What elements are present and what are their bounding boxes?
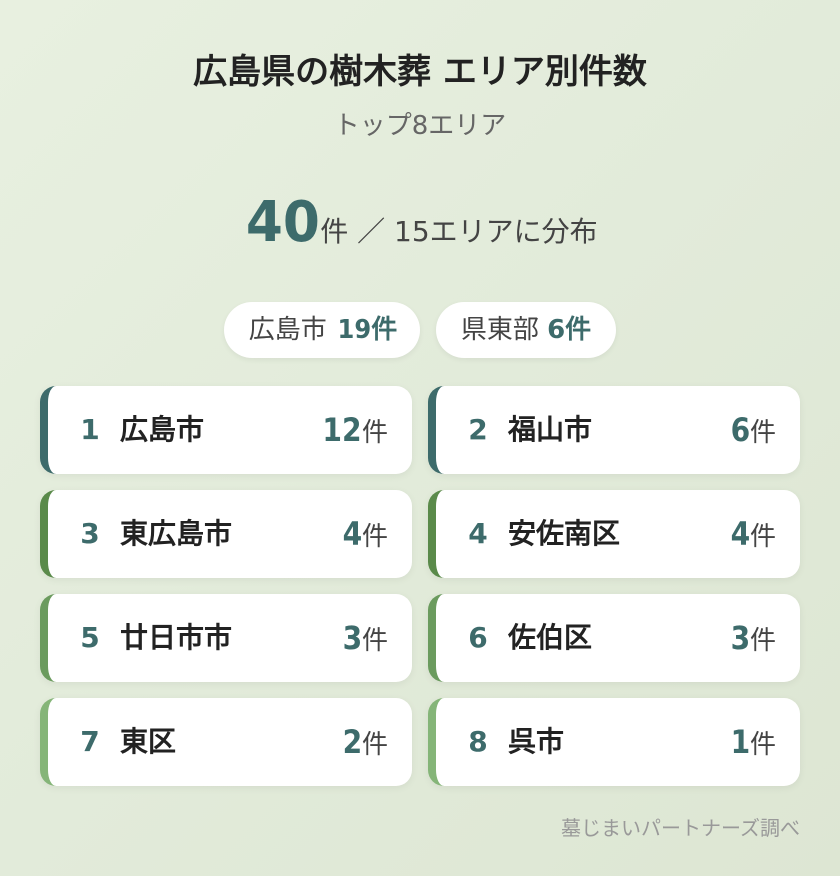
total summary — [246, 190, 598, 255]
card: rank 2: 2 — [468, 413, 488, 446]
card: rank 7 — [40, 698, 412, 786]
card: rank 1 — [40, 386, 412, 474]
card: rank 8: 1 — [730, 723, 750, 761]
card: rank 7: 2 — [342, 723, 362, 761]
card: rank 2: 6 — [730, 411, 750, 449]
card: rank 4: 4 — [468, 517, 488, 550]
card: rank 5 — [40, 594, 412, 682]
card: rank 3: 件 — [362, 522, 388, 552]
card: rank 4: 件 — [750, 522, 776, 552]
card: rank 5: 廿日市市 — [120, 621, 232, 654]
pill: east prefecture — [436, 302, 616, 358]
card: rank 6: 6 — [468, 621, 488, 654]
card: rank 7: 7 — [80, 725, 100, 758]
card: rank 3 — [40, 490, 412, 578]
card: rank 3: 東広島市 — [120, 517, 232, 550]
card: rank 7: 東区 — [120, 725, 176, 758]
card: rank 8 — [428, 698, 800, 786]
card: rank 6: 件 — [750, 626, 776, 656]
source credit: 墓じまいパートナーズ調べ — [561, 816, 800, 840]
card: rank 4: 4 — [730, 515, 750, 553]
pill: Hiroshima city: 19 — [338, 315, 371, 345]
card: rank 5: 5 — [80, 621, 100, 654]
card: rank 4 — [428, 490, 800, 578]
card: rank 8: 件 — [750, 730, 776, 760]
card: rank 6 — [428, 594, 800, 682]
card: rank 2: 福山市 — [508, 413, 592, 446]
total summary: 40 — [246, 190, 320, 255]
total summary: 件 ／ 15エリアに分布 — [320, 215, 598, 248]
card: rank 4: 安佐南区 — [508, 517, 620, 550]
card: rank 1: 広島市 — [120, 413, 204, 446]
card: rank 5: 3 — [342, 619, 362, 657]
card: rank 6: 佐伯区 — [508, 621, 592, 654]
card: rank 8: 呉市 — [508, 725, 564, 758]
card: rank 1: 1 — [80, 413, 100, 446]
card: rank 1: 件 — [362, 418, 388, 448]
pill: east prefecture: 県東部 6件 — [461, 315, 591, 345]
pill: Hiroshima city: 広島市 件 — [249, 315, 397, 345]
card: rank 3: 4 — [342, 515, 362, 553]
title: 広島県の樹木葬 エリア別件数 — [193, 52, 647, 92]
card: rank 8: 8 — [468, 725, 488, 758]
card: rank 2: 件 — [750, 418, 776, 448]
card: rank 7: 件 — [362, 730, 388, 760]
card: rank 2 — [428, 386, 800, 474]
card: rank 5: 件 — [362, 626, 388, 656]
card: rank 1: 12 — [323, 411, 362, 449]
card: rank 6: 3 — [730, 619, 750, 657]
card: rank 3: 3 — [80, 517, 100, 550]
subtitle: トップ8エリア — [334, 111, 506, 141]
pill: Hiroshima city — [224, 302, 420, 358]
